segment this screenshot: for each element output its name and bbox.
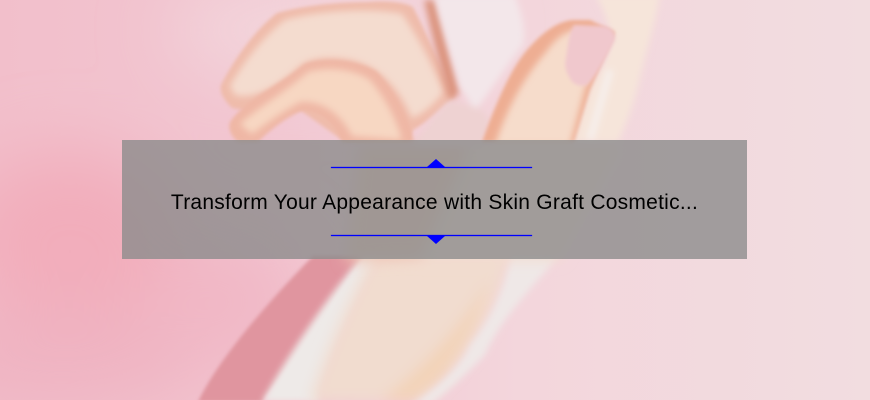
shadow beside cream [424, 0, 460, 102]
lower finger [229, 60, 414, 142]
forearm: white cream strip [262, 252, 385, 400]
fingernail [565, 25, 615, 86]
forearm: skin [310, 250, 512, 400]
shade behind band [345, 145, 620, 262]
forearm: shadowed rose edge [198, 256, 365, 400]
bottom rule with triangle [330, 234, 532, 244]
title: Transform Your Appearance with Skin Graft Cosmetic... [171, 191, 698, 214]
upper finger highlights [230, 11, 443, 118]
banner panel [122, 140, 747, 259]
forearm: right cream strip [412, 252, 558, 400]
white cream fold between fingers [415, 0, 524, 145]
main finger [482, 20, 615, 142]
top rule with triangle [330, 159, 532, 169]
main finger highlight [495, 30, 600, 145]
upper finger [221, 1, 455, 142]
right cream strip on finger [572, 0, 660, 142]
lower finger highlight [240, 69, 402, 140]
background tones [0, 0, 470, 400]
